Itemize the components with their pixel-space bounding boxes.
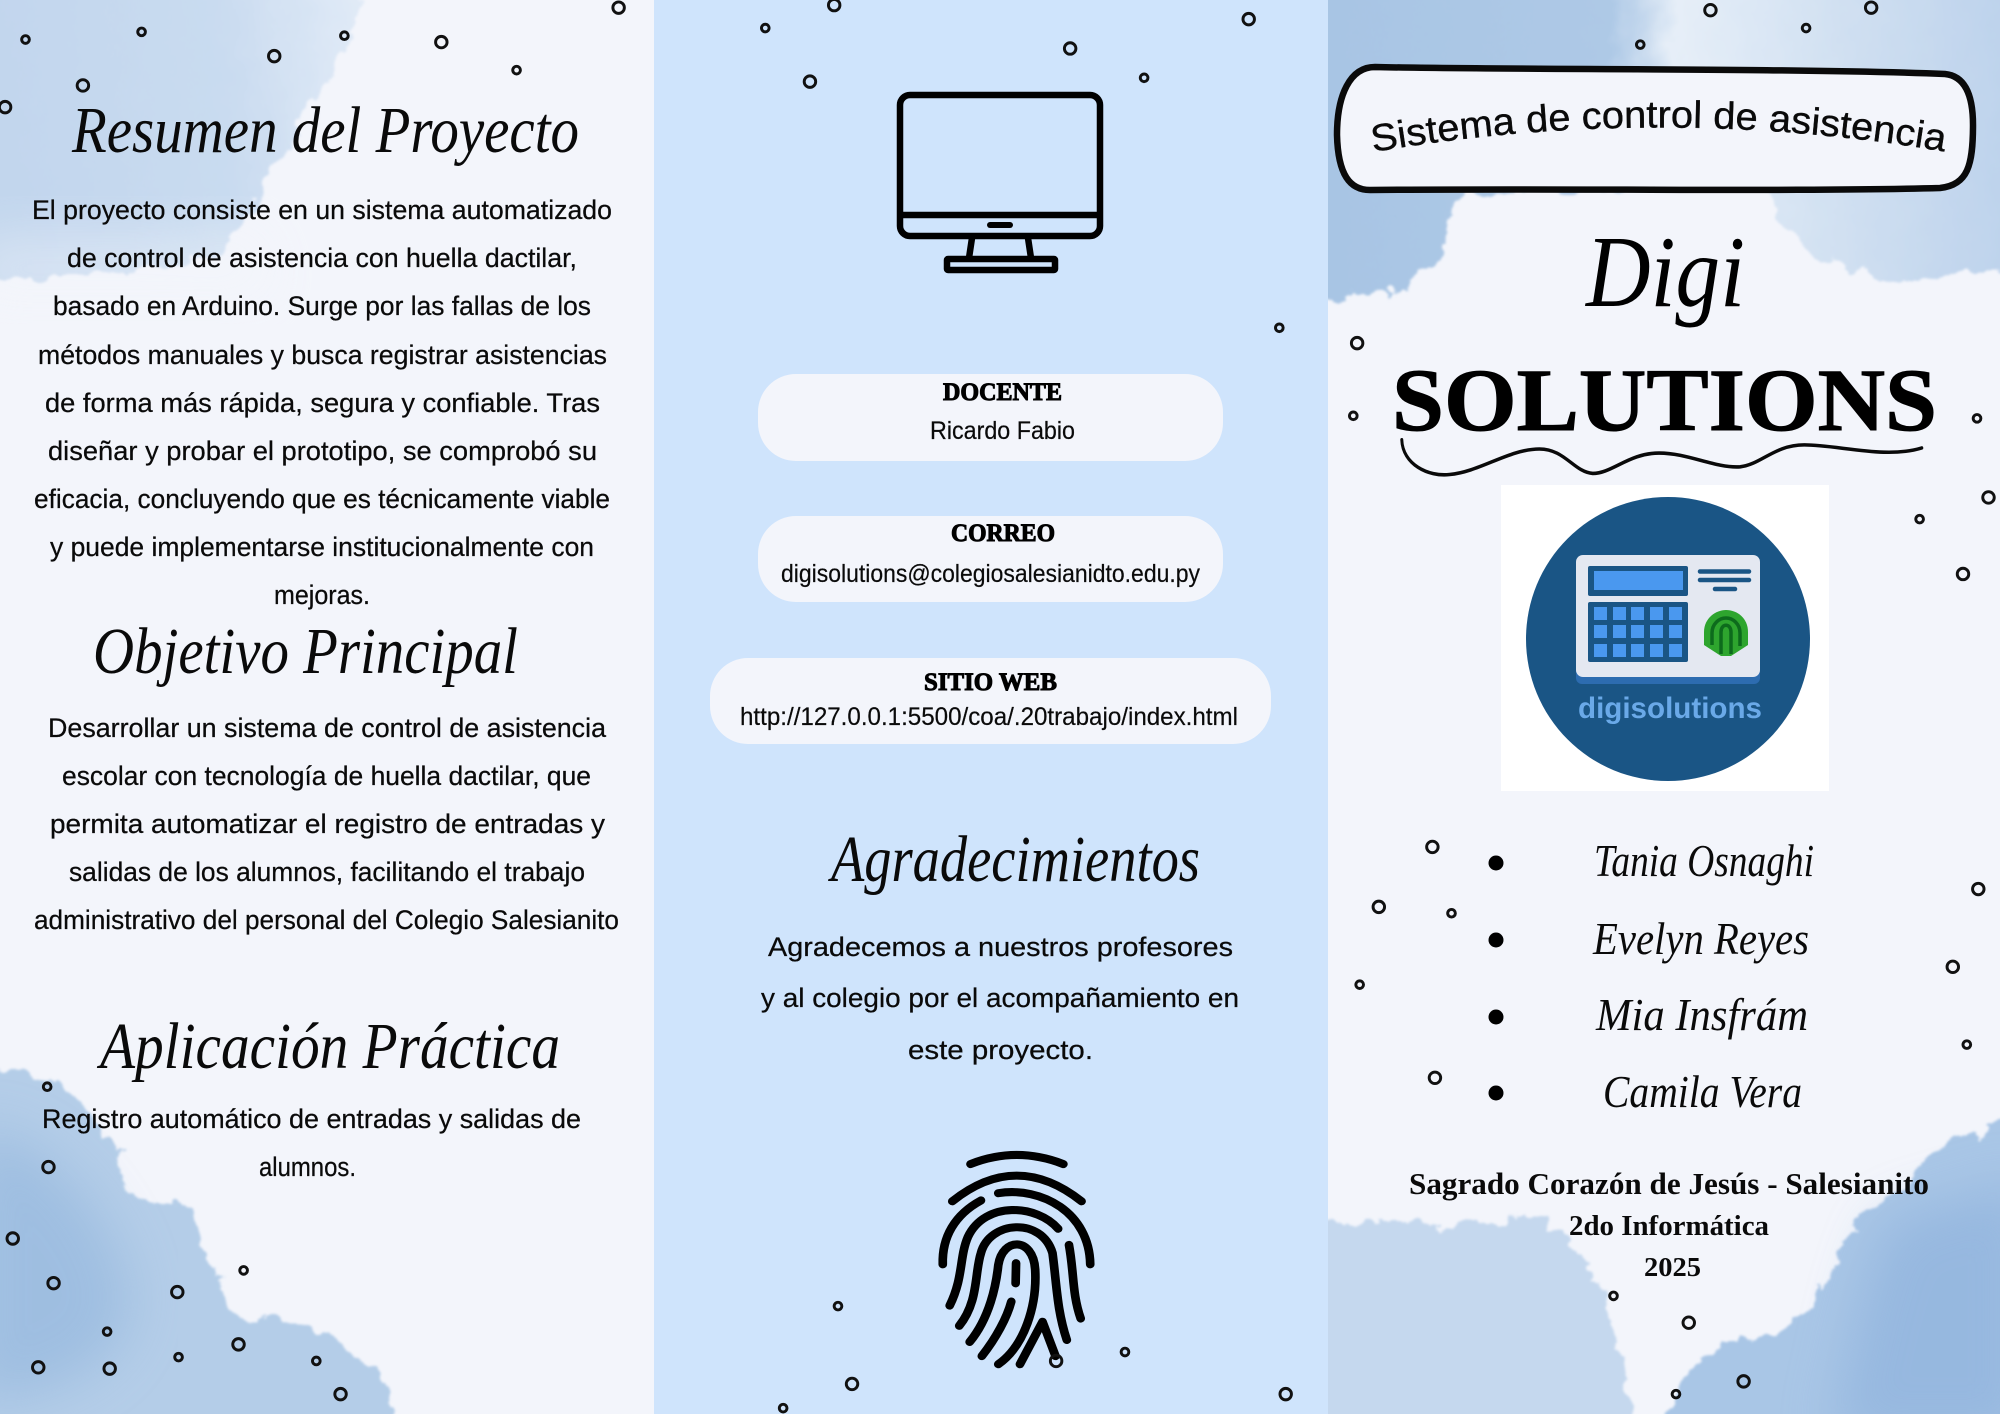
team list: Tania Osnaghi <box>1594 835 1814 886</box>
text block: aplicacion: alumnos. <box>259 1152 356 1182</box>
card: correo: digisolutions@colegiosalesianidto.edu.py <box>781 560 1200 588</box>
text block: resumen <box>32 195 612 610</box>
squiggle underline <box>1402 440 1922 475</box>
text block: objetivo: escolar con tecnología de huella dactilar, que <box>62 761 591 791</box>
text block: agradecimientos: Agradecemos a nuestros profesores <box>768 932 1233 962</box>
text block: resumen: eficacia, concluyendo que es técnicamente viable <box>34 484 610 514</box>
heading: Resumen del Proyecto: Resumen del Proyecto <box>71 94 579 167</box>
school footer: Sagrado Corazón de Jesús - Salesianito <box>1409 1166 1929 1201</box>
card: correo <box>758 516 1223 602</box>
card: correo: CORREO <box>951 520 1055 547</box>
watercolor: right top <box>1300 0 2000 300</box>
team list: Mia Insfrám <box>1595 989 1808 1040</box>
heading: Agradecimientos: Agradecimientos <box>828 823 1200 896</box>
card: sitio web: http://127.0.0.1:5500/coa/.20trabajo/index.html <box>740 703 1238 731</box>
card: docente: Ricardo Fabio <box>930 417 1075 445</box>
text block: aplicacion: Registro automático de entradas y salidas de <box>42 1104 581 1134</box>
text block: objetivo <box>34 713 619 935</box>
title: SOLUTIONS: SOLUTIONS <box>1392 352 1937 450</box>
text block: agradecimientos <box>761 932 1239 1065</box>
text block: objetivo: salidas de los alumnos, facilitando el trabajo <box>69 857 585 887</box>
card: sitio web <box>710 658 1271 744</box>
school footer: 2do Informática <box>1569 1210 1769 1242</box>
icon: monitor <box>900 95 1100 270</box>
text block: objetivo: administrativo del personal del Colegio Salesianito <box>34 905 619 935</box>
text block: resumen: métodos manuales y busca registrar asistencias <box>38 340 607 370</box>
icon: fingerprint <box>943 1155 1090 1364</box>
watercolor: left top <box>0 0 375 300</box>
team list <box>1488 835 1814 1117</box>
subtitle badge: Sistema de control de asistencia <box>1372 100 1945 152</box>
text block: agradecimientos: este proyecto. <box>908 1035 1093 1065</box>
heading: Objetivo Principal: Objetivo Principal <box>93 615 518 688</box>
school footer: 2025 <box>1644 1252 1701 1282</box>
card: docente <box>758 374 1223 461</box>
watercolor: right bottom <box>1300 1120 2000 1414</box>
text block: resumen: basado en Arduino. Surge por las fallas de los <box>53 291 591 321</box>
watercolor: left bottom <box>0 1069 395 1414</box>
text block: resumen: de control de asistencia con huella dactilar, <box>67 243 577 273</box>
text block: resumen: diseñar y probar el prototipo, se comprobó su <box>48 436 597 466</box>
text block: agradecimientos: y al colegio por el acompañamiento en <box>761 983 1239 1013</box>
subtitle badge <box>1334 64 1976 194</box>
logo <box>1501 485 1829 791</box>
text block: resumen: mejoras. <box>274 580 370 610</box>
card: sitio web: SITIO WEB <box>924 669 1057 696</box>
text block: aplicacion <box>42 1104 581 1182</box>
card: docente: DOCENTE <box>943 379 1062 406</box>
text block: resumen: El proyecto consiste en un sistema automatizado <box>32 195 612 225</box>
heading: Aplicación Práctica: Aplicación Práctica <box>97 1010 560 1083</box>
text block: objetivo: Desarrollar un sistema de control de asistencia <box>48 713 607 743</box>
panel: middle <box>654 0 1328 1414</box>
text block: resumen: y puede implementarse institucionalmente con <box>50 532 594 562</box>
text block: resumen: de forma más rápida, segura y confiable. Tras <box>45 388 600 418</box>
logo: digisolutions <box>1578 692 1762 725</box>
team list: Evelyn Reyes <box>1592 913 1809 964</box>
panel: right <box>1328 0 2000 1414</box>
title: Digi: Digi <box>1584 216 1745 329</box>
text block: objetivo: permita automatizar el registro de entradas y <box>50 809 606 839</box>
school footer <box>1409 1166 1929 1282</box>
team list: Camila Vera <box>1603 1066 1802 1117</box>
panel: left <box>0 0 654 1414</box>
